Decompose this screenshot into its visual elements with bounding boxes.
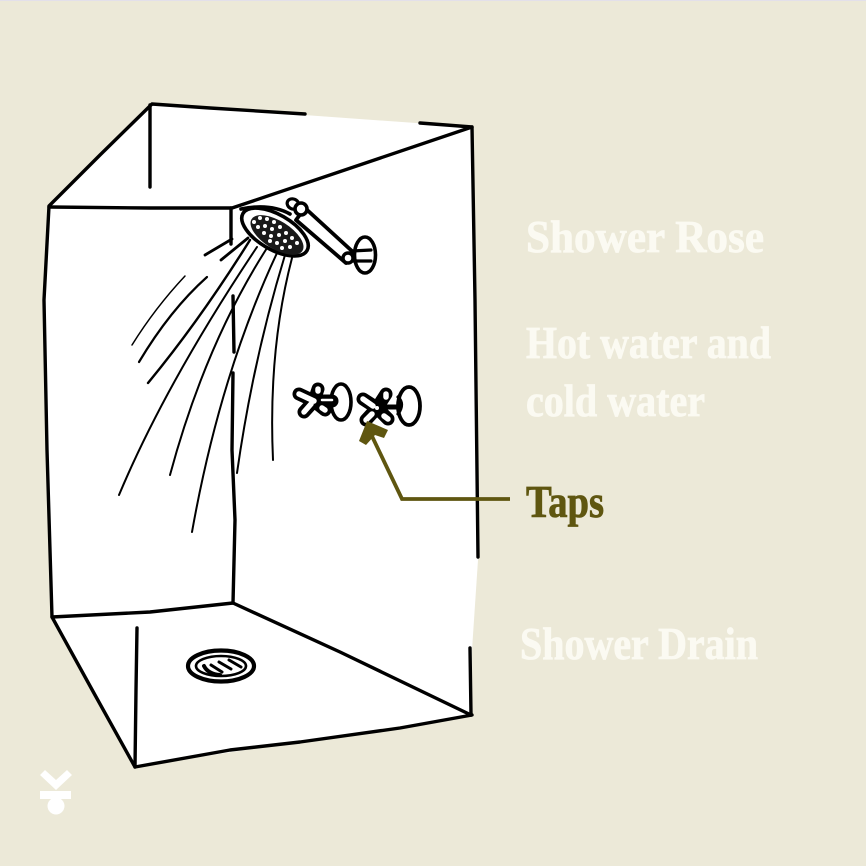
label: shower drain: Shower Drain [520, 618, 758, 669]
label: hot water and cold water: Hot water and [526, 317, 771, 368]
taps arrow [359, 421, 510, 499]
right tap [363, 387, 420, 425]
label: hot water and cold water: cold water [526, 375, 705, 426]
label: shower rose: Shower Rose [526, 211, 764, 262]
logo [40, 770, 72, 814]
left tap [299, 384, 351, 420]
label: taps: Taps [526, 476, 604, 527]
shower rose [234, 197, 376, 273]
shower cubicle [44, 104, 510, 767]
shower drain [188, 650, 254, 682]
label: hot water and cold water [526, 317, 771, 426]
shower arm [296, 208, 353, 263]
cubicle line drawing [44, 104, 478, 767]
cubicle white surface [44, 104, 478, 767]
water jets [119, 238, 292, 532]
